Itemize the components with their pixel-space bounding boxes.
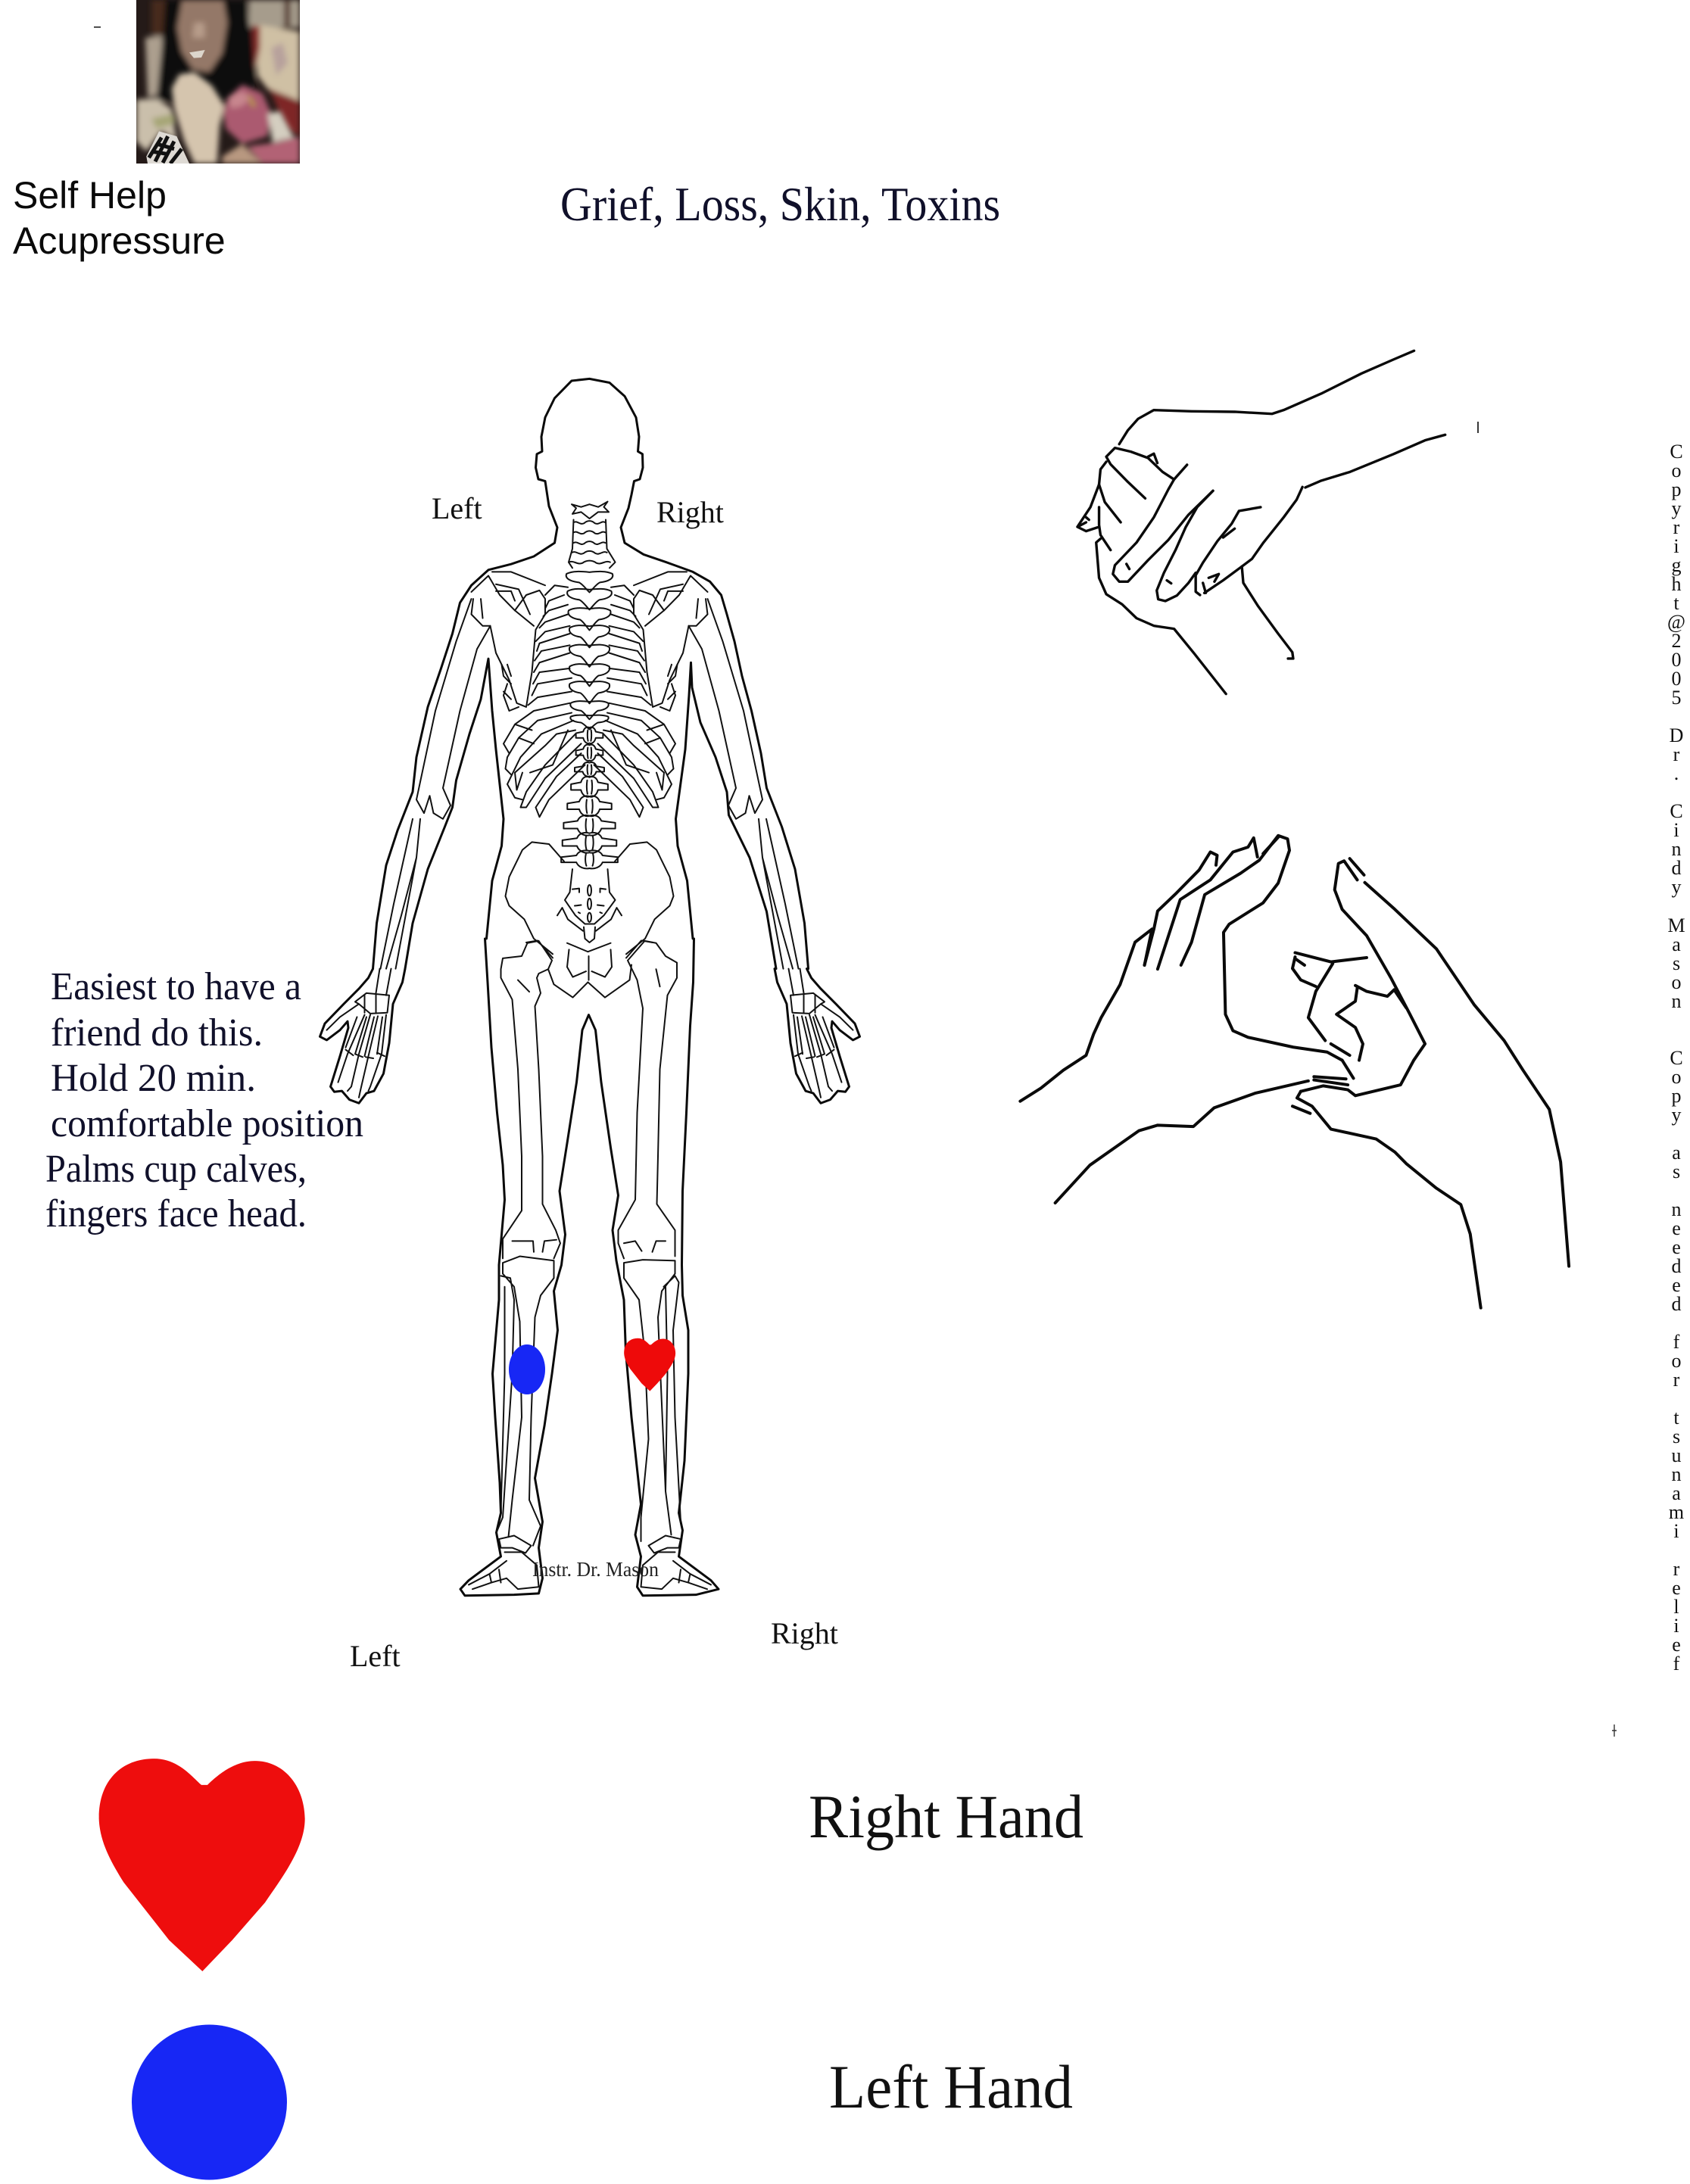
vertical copyright strip: l — [1673, 1596, 1679, 1618]
vertical copyright strip: m — [1669, 1501, 1684, 1523]
vertical copyright strip: u — [1672, 1444, 1681, 1466]
vertical copyright strip: n — [1672, 838, 1681, 860]
legend icon: red heart — [99, 1759, 305, 1971]
vertical copyright strip: r — [1673, 1369, 1680, 1391]
instructions text block: Easiest to have a — [51, 965, 301, 1008]
illustration: hands cupping calf, side view — [1020, 836, 1569, 1308]
vertical copyright strip: 2 — [1672, 630, 1681, 652]
small stray mark — [1612, 1724, 1617, 1737]
vertical copyright strip: 0 — [1672, 668, 1681, 690]
vertical copyright strip: p — [1672, 1085, 1681, 1107]
left and right body labels — [350, 491, 838, 1673]
tiny dash mark — [94, 26, 101, 28]
vertical copyright strip: r — [1673, 1558, 1680, 1580]
small tick mark near hand — [1477, 422, 1479, 433]
legend: right hand — [99, 1759, 1084, 1971]
vertical copyright strip: h — [1672, 573, 1681, 595]
instructions text block: Palms cup calves, — [45, 1148, 307, 1191]
vertical copyright strip: o — [1672, 1350, 1681, 1372]
legend icon: blue circle — [132, 2024, 287, 2180]
legend label: Left Hand: Left Hand — [829, 2052, 1073, 2121]
blue point: left hand on left calf — [509, 1344, 545, 1394]
body outline lower — [460, 939, 719, 1596]
vertical copyright strip: 0 — [1672, 649, 1681, 671]
instructions text block: friend do this. — [51, 1011, 263, 1055]
vertical copyright strip: i — [1673, 819, 1679, 841]
heading: Self Help Acupressure: Acupressure — [13, 220, 226, 262]
vertical copyright strip: e — [1672, 1274, 1681, 1296]
vertical copyright strip: @ — [1667, 611, 1685, 633]
vertical copyright strip: 5 — [1672, 687, 1681, 709]
vertical copyright strip: C — [1670, 441, 1683, 463]
vertical copyright strip: a — [1672, 1482, 1681, 1504]
title: Grief, Loss, Skin, Toxins — [560, 177, 1000, 231]
red heart point: right hand on right calf — [624, 1338, 675, 1391]
torso half: scapula, arm bones, ribs — [380, 572, 585, 969]
legend: left hand — [132, 2024, 1073, 2180]
vertical copyright strip: i — [1673, 535, 1679, 557]
label: Right lower: Right — [771, 1616, 838, 1650]
vertical copyright strip: o — [1672, 1066, 1681, 1088]
teeth — [189, 50, 205, 58]
instructions text block: fingers face head. — [45, 1192, 307, 1235]
vertical copyright strip: r — [1673, 516, 1680, 538]
label: Left lower: Left — [350, 1639, 401, 1673]
vertical copyright strip: e — [1672, 1217, 1681, 1239]
vertical copyright strip: t — [1673, 592, 1679, 614]
vertical copyright strip: y — [1672, 497, 1681, 519]
vertical copyright strip: e — [1672, 1236, 1681, 1258]
vertical copyright strip: a — [1672, 1142, 1681, 1164]
vertical copyright strip: i — [1673, 1615, 1679, 1637]
photo: woman holding plush toys — [136, 0, 300, 164]
vertical copyright strip: d — [1672, 1255, 1681, 1277]
instructions text block: comfortable position — [51, 1102, 363, 1145]
vertical copyright strip: . — [1674, 762, 1679, 784]
vertical copyright strip: f — [1673, 1331, 1680, 1353]
vertical copyright strip: a — [1672, 933, 1681, 955]
vertical copyright strip: o — [1672, 971, 1681, 993]
tibia and fibula — [497, 1257, 554, 1546]
label: Left upper: Left — [432, 491, 482, 525]
skeleton body chart — [320, 379, 860, 1673]
legend label: Right Hand: Right Hand — [809, 1782, 1084, 1851]
vertical copyright strip: d — [1672, 857, 1681, 879]
vertical copyright strip: s — [1673, 952, 1680, 974]
label: Right upper: Right — [656, 495, 724, 529]
vertical copyright strip: y — [1672, 1104, 1681, 1126]
vertical copyright strip: n — [1672, 1198, 1681, 1220]
foot bones mirrored — [641, 1535, 711, 1589]
left skeletal hand — [320, 969, 405, 1103]
vertical copyright strip: C — [1670, 800, 1683, 822]
vertical copyright strip: f — [1673, 1653, 1680, 1675]
lower body: pelvis, legs and hands — [320, 939, 860, 1596]
vertical copyright strip: n — [1672, 990, 1681, 1012]
vertical copyright strip: C — [1670, 1047, 1683, 1069]
vertical copyright strip: p — [1672, 478, 1681, 500]
vertical copyright strip: d — [1672, 1293, 1681, 1315]
femurs and knees — [501, 941, 560, 1258]
vertical copyright strip: D — [1670, 724, 1683, 746]
body outline upper — [373, 379, 809, 969]
pelvis floor — [548, 943, 631, 998]
vertical copyright strip: n — [1672, 1463, 1681, 1485]
vertical copyright strip: M — [1667, 914, 1685, 936]
credit: Instr. Dr. Mason: Instr. Dr. Mason — [532, 1558, 659, 1581]
vertical copyright strip: r — [1673, 743, 1680, 765]
upper body: head, torso and arms — [373, 379, 809, 969]
illustration: hands cupping calf, top view — [1077, 350, 1445, 694]
vertical copyright strip: t — [1673, 1407, 1679, 1428]
vertical copyright strip: e — [1672, 1634, 1681, 1656]
vertical copyright strip: i — [1673, 1520, 1679, 1542]
vertical copyright strip: s — [1673, 1161, 1680, 1182]
zebra plush — [146, 131, 189, 164]
vertical copyright strip: e — [1672, 1577, 1681, 1599]
right skeletal hand mirrored — [775, 969, 860, 1103]
feet bones — [469, 1535, 539, 1589]
torso sides and inner arms — [405, 659, 776, 969]
vertical copyright strip: g — [1672, 554, 1681, 576]
vertical copyright strip: y — [1672, 876, 1681, 898]
instructions text block: Hold 20 min. — [51, 1057, 256, 1100]
spine — [561, 502, 618, 942]
vertical copyright strip: o — [1672, 460, 1681, 481]
torso half mirrored — [594, 572, 798, 969]
heading: Self Help Acupressure: Self Help — [13, 174, 167, 217]
vertical copyright strip: s — [1673, 1425, 1680, 1447]
